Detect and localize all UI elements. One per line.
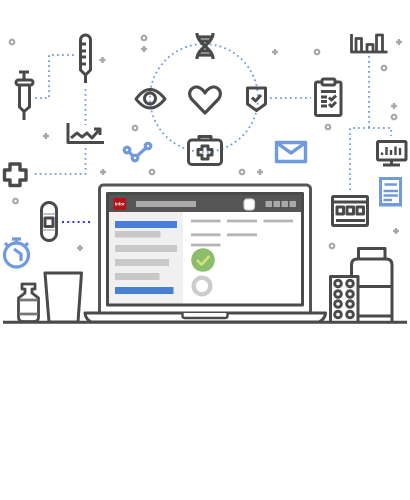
- logo: infor: [115, 202, 125, 206]
- icon: clipboard: [316, 79, 341, 116]
- sidebar menu items: [115, 221, 177, 294]
- laptop screen frame: [108, 194, 302, 305]
- icon: large bottle: [352, 248, 392, 322]
- icon: small jar: [18, 284, 38, 322]
- gray status ring: [194, 278, 210, 294]
- header menu squares: [266, 201, 296, 207]
- icon: shield: [248, 88, 266, 110]
- icon: medical cross: [4, 164, 26, 186]
- header search button: [244, 199, 254, 210]
- icon: DNA: [197, 33, 213, 59]
- icon: syringe: [16, 72, 33, 120]
- content lines: [191, 221, 293, 245]
- sidebar panel: [109, 212, 183, 304]
- decorative plus signs: [43, 39, 402, 251]
- laptop lid: [100, 185, 311, 313]
- icon: line chart: [68, 123, 104, 142]
- header title bar: [136, 201, 196, 207]
- app header bar: [109, 195, 301, 212]
- icon: eye: [136, 90, 165, 108]
- dotted connector lines: [34, 44, 391, 190]
- icon: cup: [45, 273, 82, 322]
- icon: heart: [190, 87, 220, 113]
- icon: browser window: [332, 196, 368, 226]
- laptop base: [85, 313, 326, 322]
- trackpad notch: [182, 313, 228, 318]
- icon: stopwatch: [4, 239, 28, 267]
- icon: bar chart: [352, 34, 388, 52]
- icon: document: [379, 177, 402, 206]
- icon: medical kit: [188, 136, 222, 164]
- icon: blister pack: [330, 276, 358, 322]
- laptop: [85, 185, 326, 322]
- decorative dots: [10, 36, 396, 248]
- ground line: [3, 321, 407, 324]
- green check badge: [191, 248, 215, 272]
- logo: [114, 198, 126, 210]
- icon: monitor: [378, 142, 406, 165]
- connector: pill to laptop: [62, 221, 93, 223]
- icon: connected nodes: [124, 143, 151, 161]
- icon: thermometer: [80, 35, 90, 83]
- icon: bandage pill: [42, 202, 56, 240]
- icon: envelope: [276, 142, 306, 162]
